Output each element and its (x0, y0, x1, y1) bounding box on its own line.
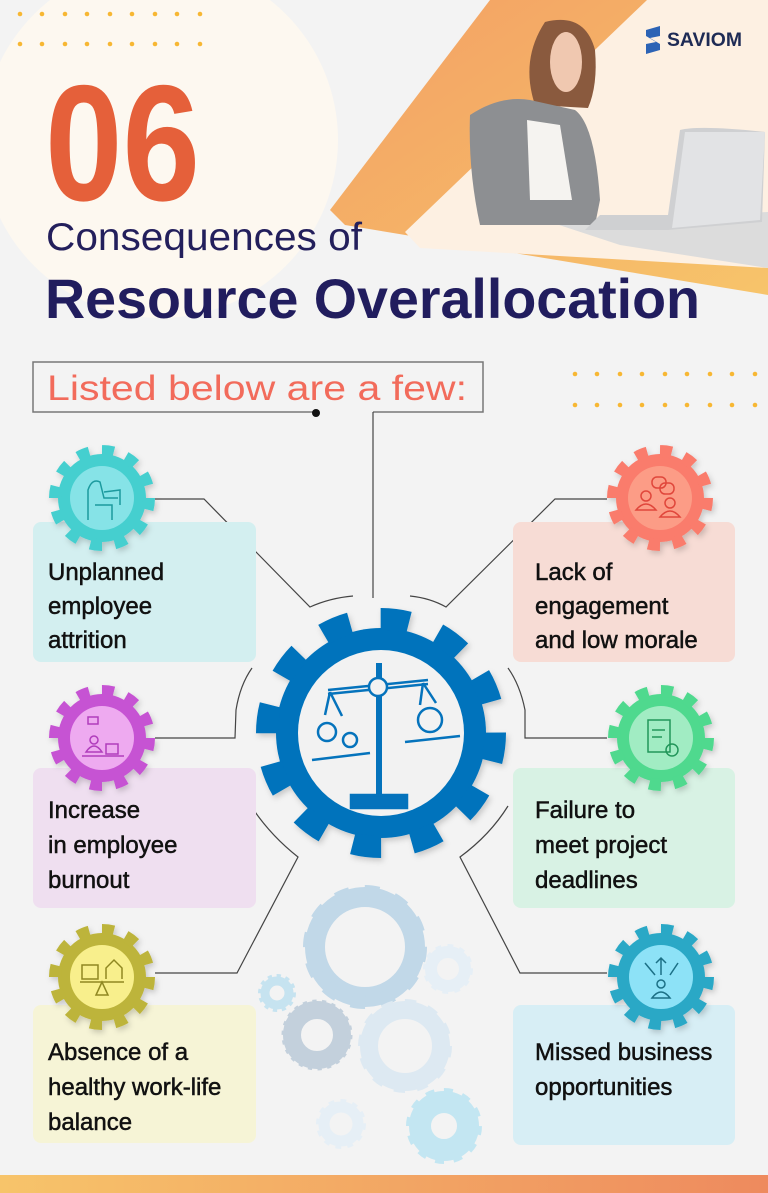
icon: green gear (614, 691, 708, 785)
panel: failure to meet deadlines: Failure to (535, 797, 635, 824)
panel: unplanned employee attrition: attrition (48, 627, 127, 654)
panel: employee burnout: in employee (48, 832, 177, 859)
panel: lack of engagement (513, 451, 735, 662)
panel: unplanned employee attrition: employee (48, 593, 152, 620)
intro box: Listed below are a few: (47, 369, 467, 408)
panel: failure to meet deadlines: deadlines (535, 867, 638, 894)
icon: blue gear (614, 930, 708, 1024)
connector lines (155, 412, 607, 973)
bottom bar (0, 1175, 768, 1193)
panel: employee burnout: burnout (48, 867, 130, 894)
panel: missed business opportunities (513, 930, 735, 1145)
panel: failure to meet deadlines (513, 691, 735, 908)
logo (646, 26, 742, 54)
background gears (261, 892, 477, 1159)
icon: purple gear (55, 691, 149, 785)
panel: work-life balance: Absence of a (48, 1039, 189, 1066)
central gear with scale icon (267, 619, 495, 847)
dots top left (18, 12, 202, 46)
panel: lack of engagement: engagement (535, 593, 669, 620)
icon: teal gear (55, 451, 149, 545)
panel: work-life balance (33, 930, 256, 1143)
panel: work-life balance: balance (48, 1109, 132, 1136)
logo: SAVIOM (667, 30, 742, 51)
panel: failure to meet deadlines: meet project (535, 832, 667, 859)
panel: work-life balance: healthy work-life (48, 1074, 221, 1101)
panel: missed business opportunities: opportunities (535, 1074, 672, 1101)
panel: lack of engagement: and low morale (535, 627, 698, 654)
icon: coral gear (613, 451, 707, 545)
orange triangle banner (330, 0, 768, 295)
panel: unplanned employee attrition (33, 451, 256, 662)
photo: woman at laptop (470, 20, 765, 230)
panel: lack of engagement: Lack of (535, 559, 613, 586)
panel: unplanned employee attrition: Unplanned (48, 559, 164, 586)
panel: employee burnout: Increase (48, 797, 140, 824)
subtitle: Consequences of (46, 216, 362, 259)
intro box (33, 362, 483, 417)
panel: missed business opportunities: Missed business (535, 1039, 712, 1066)
title number: 06 (45, 51, 200, 235)
icon: balance scale (312, 663, 460, 808)
main title: Resource Overallocation (45, 267, 700, 330)
background circle (0, 0, 338, 318)
dots right (573, 372, 757, 407)
panel: employee burnout (33, 691, 256, 908)
icon: olive gear (55, 930, 149, 1024)
